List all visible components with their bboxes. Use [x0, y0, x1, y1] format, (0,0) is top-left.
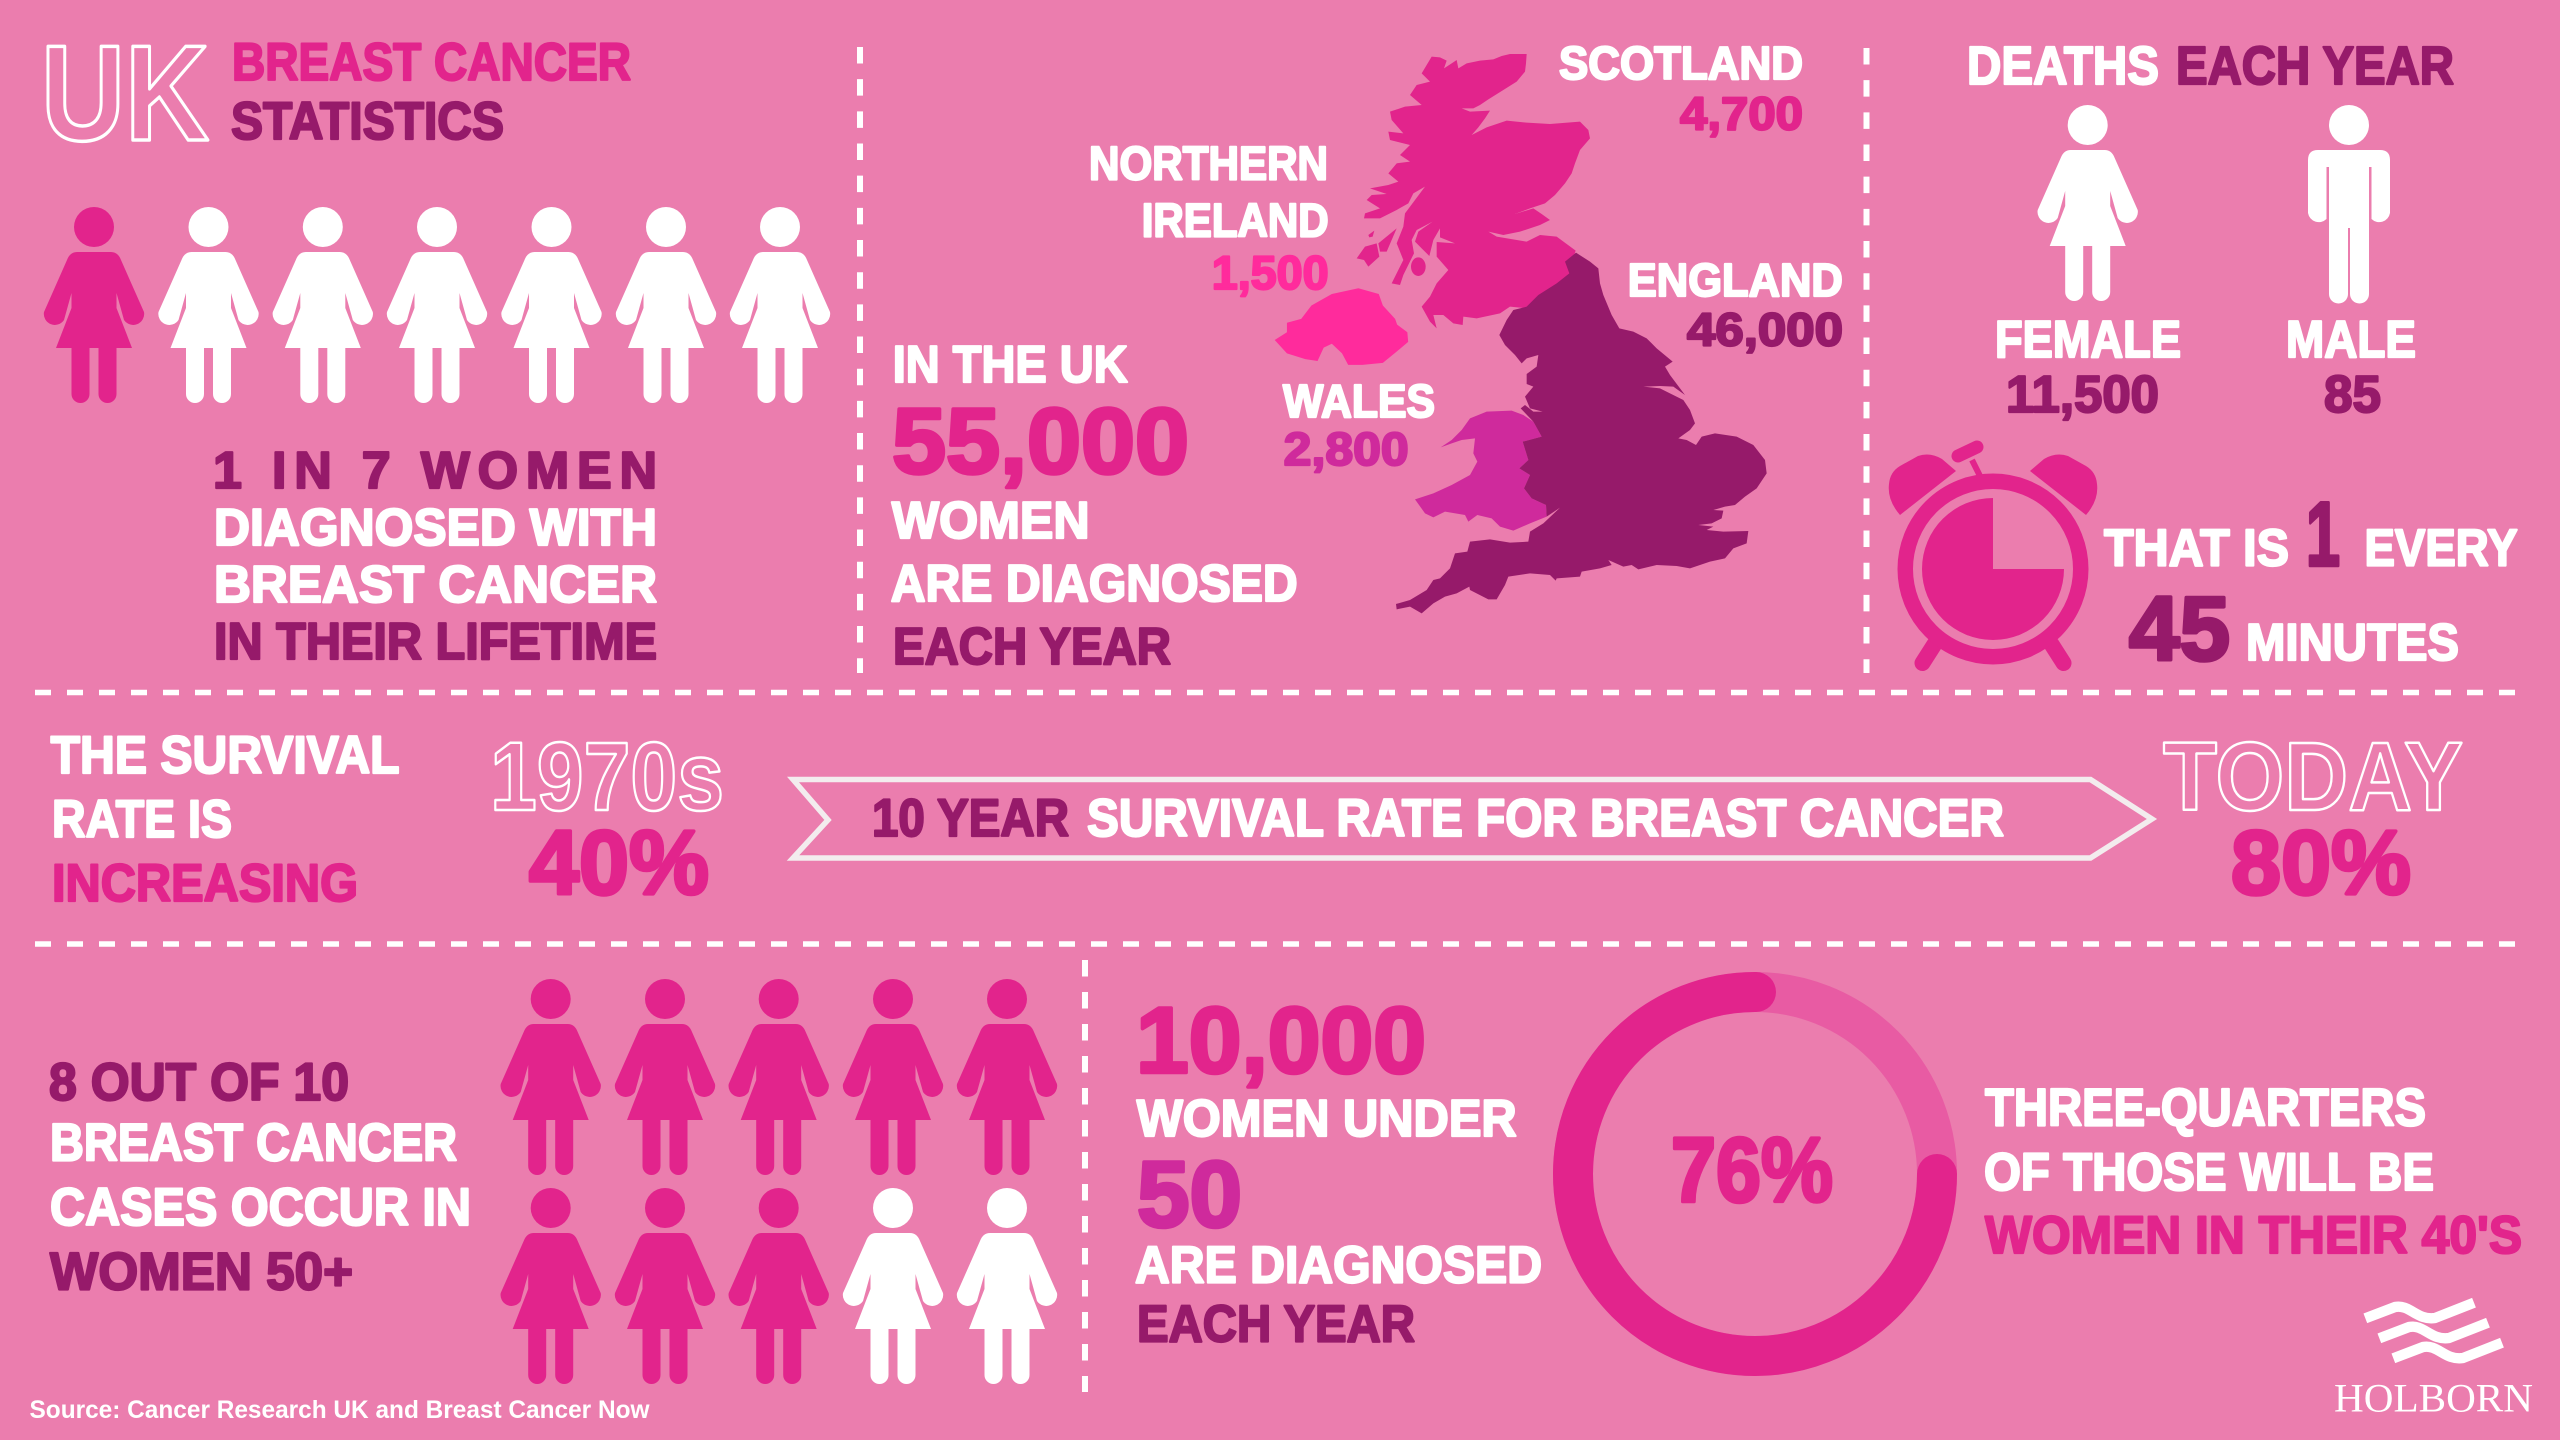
- text: three-quarters: THREE-QUARTERS: [1985, 1079, 2426, 1138]
- text: 10,000 women under 50: 50: [1137, 1142, 1242, 1247]
- text: 1 every 45 minutes: MINUTES: [2246, 614, 2459, 672]
- stat: today 80%: 80%: [2231, 813, 2411, 914]
- title: UK: [41, 17, 209, 169]
- map: England: [1396, 253, 1767, 613]
- label: Scotland 4,700: 4,700: [1680, 88, 1803, 140]
- title: BREAST CANCER: [232, 33, 631, 92]
- map: Wales: [1415, 411, 1547, 531]
- pictogram: ten women, eight highlighted: [501, 979, 1057, 1384]
- text: 8 out of 10 cases: [49, 1053, 471, 1301]
- label: Northern Ireland 1,500: [1089, 136, 1329, 299]
- map of the UK: [1275, 54, 1767, 613]
- heading: EACH YEAR: [2176, 36, 2454, 96]
- text: 10,000 women under 50: EACH YEAR: [1137, 1296, 1415, 1354]
- text: three-quarters: OF THOSE WILL BE: [1984, 1143, 2434, 1202]
- stat: today 80%: [2163, 722, 2463, 914]
- panel: survival rate: [51, 722, 2463, 914]
- stat: male 85: [2286, 311, 2416, 424]
- text: 10,000 women under 50: ARE DIAGNOSED: [1135, 1237, 1542, 1295]
- title: [41, 17, 631, 169]
- label: England 46,000: ENGLAND: [1628, 254, 1843, 306]
- label: Scotland 4,700: SCOTLAND: [1559, 37, 1803, 89]
- text: 8 out of 10 cases: BREAST CANCER: [50, 1114, 457, 1173]
- text: the survival rate is increasing: [51, 726, 400, 913]
- title: STATISTICS: [231, 92, 504, 151]
- stat: 1970s 40%: 1970s: [490, 722, 724, 831]
- panel: deaths each year: [1889, 36, 2518, 680]
- label: England 46,000: [1628, 254, 1843, 356]
- label: Wales 2,800: 2,800: [1284, 423, 1409, 475]
- label: Northern Ireland 1,500: IRELAND: [1142, 193, 1329, 246]
- text: 8 out of 10 cases: CASES OCCUR IN: [50, 1178, 471, 1237]
- text: 55,000 women diagnosed: 55,000: [892, 389, 1189, 493]
- stat: male 85: 85: [2324, 366, 2381, 424]
- logo: Holborn: [2334, 1303, 2533, 1421]
- map: Northern Ireland: [1275, 288, 1408, 365]
- stat: 1970s 40%: [490, 722, 724, 914]
- panel: women under 50: [1135, 988, 2522, 1356]
- text: 1 in 7 women diagnosed: BREAST CANCER: [214, 556, 657, 614]
- text: 55,000 women diagnosed: WOMEN: [892, 492, 1090, 550]
- label: England 46,000: 46,000: [1687, 304, 1843, 356]
- icon: alarm clock: [1889, 447, 2097, 663]
- heading: DEATHS: [1967, 36, 2159, 96]
- text: 1 in 7 women diagnosed: IN THEIR LIFETIME: [214, 613, 657, 671]
- text: 10,000 women under 50: [1135, 988, 1542, 1354]
- text: 1 in 7 women diagnosed: 1 IN 7 WOMEN: [213, 442, 657, 500]
- source note: Source: Cancer Research UK and Breast Cancer Now: [30, 1396, 650, 1424]
- arrow banner: 10 year survival rate: SURVIVAL RATE FOR BREAST CANCER: [1087, 789, 2004, 848]
- text: 55,000 women diagnosed: IN THE UK: [893, 336, 1128, 394]
- panel: diagnoses map: [891, 37, 1843, 676]
- icon: female figure: [2038, 105, 2138, 301]
- panel: 1 in 7 women: [41, 17, 830, 671]
- text: 55,000 women diagnosed: EACH YEAR: [893, 618, 1171, 676]
- text: 1 every 45 minutes: [2104, 485, 2518, 680]
- arrow banner: 10 year survival rate: 10 YEAR: [872, 789, 1069, 848]
- stat: today 80%: TODAY: [2163, 722, 2463, 831]
- logo: Holborn: HOLBORN: [2334, 1376, 2533, 1421]
- text: the survival rate is increasing: THE SURVIVAL: [51, 726, 400, 785]
- text: 1 every 45 minutes: THAT IS: [2104, 520, 2289, 578]
- label: Wales 2,800: [1283, 375, 1435, 475]
- label: Scotland 4,700: [1559, 37, 1803, 140]
- text: 1 every 45 minutes: 1: [2306, 485, 2340, 586]
- label: Wales 2,800: WALES: [1283, 375, 1435, 427]
- arrow banner: 10 year survival rate: [793, 780, 2152, 858]
- text: the survival rate is increasing: RATE IS: [52, 790, 232, 849]
- text: 8 out of 10 cases: 8 OUT OF 10: [49, 1053, 349, 1112]
- text: 10,000 women under 50: 10,000: [1136, 988, 1426, 1093]
- icon: male figure: [2308, 105, 2390, 304]
- text: three-quarters: [1984, 1079, 2522, 1265]
- stat: 1970s 40%: 40%: [529, 813, 709, 914]
- text: 55,000 women diagnosed: [891, 336, 1298, 676]
- text: 10,000 women under 50: WOMEN UNDER: [1137, 1090, 1517, 1148]
- text: three-quarters: WOMEN IN THEIR 40'S: [1985, 1206, 2522, 1265]
- donut chart: 76%: 76%: [1671, 1120, 1833, 1222]
- donut chart: 76%: [1573, 992, 1937, 1356]
- panel: 8 out of 10: [49, 979, 1057, 1384]
- label: Northern Ireland 1,500: NORTHERN: [1089, 136, 1328, 189]
- label: Northern Ireland 1,500: 1,500: [1212, 246, 1329, 299]
- text: 55,000 women diagnosed: ARE DIAGNOSED: [891, 555, 1298, 613]
- pictogram: seven women, one highlighted: [44, 207, 830, 403]
- text: 1 in 7 women diagnosed: DIAGNOSED WITH: [214, 499, 657, 557]
- stat: male 85: MALE: [2286, 311, 2416, 369]
- text: 1 every 45 minutes: 45: [2129, 579, 2230, 680]
- text: 8 out of 10 cases: WOMEN 50+: [50, 1242, 353, 1301]
- stat: female 11,500: [1995, 311, 2181, 424]
- text: 1 every 45 minutes: EVERY: [2364, 520, 2518, 578]
- text: 1 in 7 women diagnosed: [213, 442, 657, 671]
- stat: female 11,500: 11,500: [2006, 366, 2159, 424]
- stat: female 11,500: FEMALE: [1995, 311, 2181, 369]
- text: the survival rate is increasing: INCREASING: [52, 854, 358, 913]
- map: Scotland: [1357, 54, 1590, 328]
- heading: [1967, 36, 2454, 96]
